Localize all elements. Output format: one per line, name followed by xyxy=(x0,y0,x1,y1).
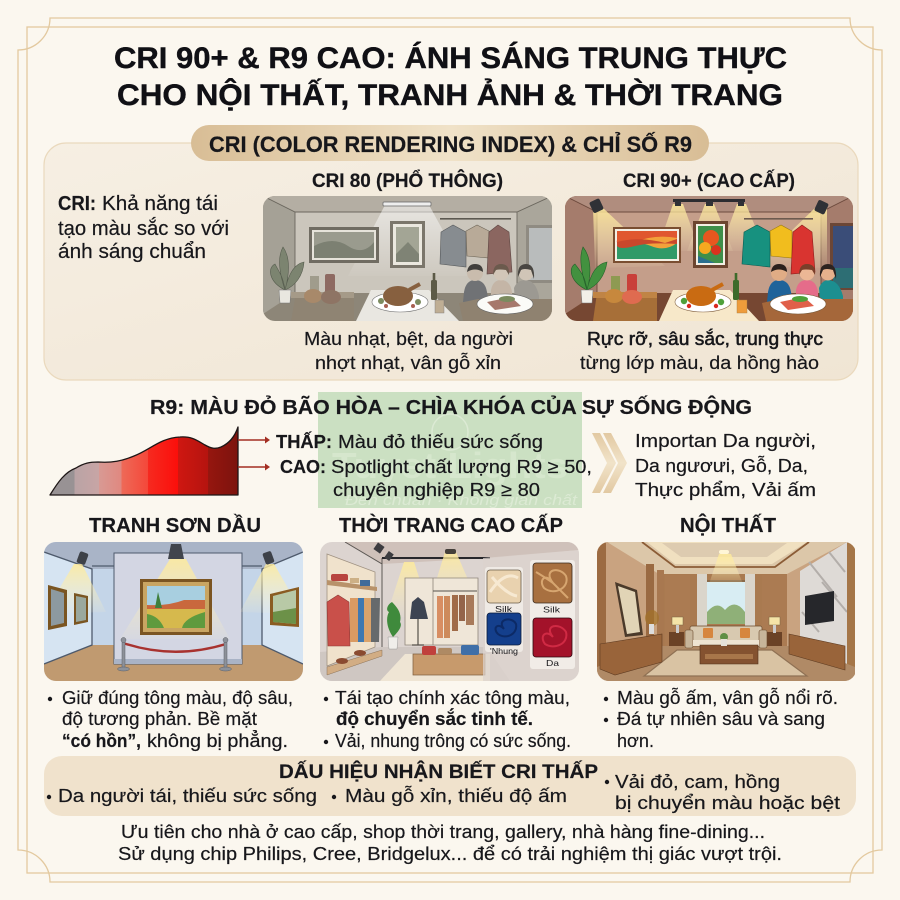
heading: R9: R9: MÀU ĐỎ BÃO HÒA – CHÌA KHÓA CỦA SỰ SỐNG ĐỘNG xyxy=(150,395,752,419)
text: important subjects: Importan Da người, xyxy=(635,430,816,451)
title: CHO NỘI THẤT, TRANH ẢNH & THỜI TRANG xyxy=(117,78,783,112)
arrow: high xyxy=(238,464,270,470)
bullets: interior: Màu gỗ ấm, vân gỗ nổi rõ. xyxy=(617,687,838,708)
bullets: oil painting: không bị phẳng. xyxy=(147,730,288,751)
caption: CRI 90+: từng lớp màu, da hồng hào xyxy=(580,352,819,373)
text: important subjects xyxy=(635,430,816,500)
text: high R9: Spotlight chất lượng R9 ≥ 50, xyxy=(331,456,592,477)
caption: CRI 80: nhợt nhạt, vân gỗ xỉn xyxy=(315,352,501,373)
heading: low CRI signs: DẤU HIỆU NHẬN BIẾT CRI THẤP xyxy=(279,759,598,783)
text: high R9 xyxy=(280,456,592,500)
swatch label: velvet: 'Nhung xyxy=(490,646,518,656)
text: important subjects: Thực phẩm, Vải ấm xyxy=(635,479,816,500)
panel: low CRI signs xyxy=(44,756,856,816)
CRI definition text: Khả năng tái xyxy=(102,193,218,215)
footer text: Ưu tiên cho nhà ở cao cấp, shop thời trang, gallery, nhà hàng fine-dining... xyxy=(121,821,765,842)
bullets: interior xyxy=(604,687,838,751)
bullets: fashion: Vải, nhung trông có sức sống. xyxy=(335,730,571,751)
heading: oil painting: TRANH SƠN DẦU xyxy=(89,514,261,537)
section: R9 xyxy=(50,395,816,500)
sign: fabric: Vải đỏ, cam, hồng xyxy=(615,771,780,792)
footer text: Sử dụng chip Philips, Cree, Bridgelux... để có trải nghiệm thị giác vượt trội. xyxy=(118,843,782,864)
bullets: interior: hơn. xyxy=(617,730,654,751)
panel: CRI comparison xyxy=(44,125,858,380)
CRI definition text: CRI: xyxy=(58,193,96,215)
heading pill: CRI and R9 xyxy=(191,125,709,161)
heading: interior: NỘI THẤT xyxy=(680,513,776,537)
arrow: low xyxy=(238,436,270,444)
icon: double chevron xyxy=(592,433,627,493)
sign: fabric xyxy=(605,771,840,813)
swatch: silk cream xyxy=(487,570,521,603)
title: CRI 90+ & R9 CAO: ÁNH SÁNG TRUNG THỰC xyxy=(114,41,787,75)
text: high R9: CAO: xyxy=(280,456,326,477)
bullets: fashion xyxy=(324,687,571,751)
footer text xyxy=(118,821,782,864)
CRI definition text xyxy=(58,193,229,263)
watermark xyxy=(318,392,582,509)
bullets: oil painting: độ tương phản. Bề mặt xyxy=(62,708,257,729)
illustration: living room xyxy=(597,542,855,681)
illustration: fashion boutique xyxy=(320,542,579,681)
CRI definition text: ánh sáng chuẩn xyxy=(58,241,206,263)
watermark: Đèn chuẩn · Không gian chất xyxy=(345,492,578,509)
text: high R9: chuyên nghiệp R9 ≥ 80 xyxy=(333,479,540,500)
title xyxy=(114,41,787,112)
watermark: Tuyet Lights xyxy=(332,445,568,486)
label: CRI 80: CRI 80 (PHỔ THÔNG) xyxy=(312,168,503,192)
sign: fabric: bị chuyển màu hoặc bệt xyxy=(615,792,840,813)
text: low R9: THẤP: xyxy=(276,431,332,452)
text: low R9: Màu đỏ thiếu sức sống xyxy=(338,431,543,452)
bullets: oil painting: “có hồn”, xyxy=(62,730,141,751)
chart: red saturation curve xyxy=(50,427,238,495)
bullets: interior: Đá tự nhiên sâu và sang xyxy=(617,708,825,729)
label: CRI 90+: CRI 90+ (CAO CẤP) xyxy=(623,169,795,192)
bullets: oil painting: Giữ đúng tông màu, độ sâu, xyxy=(62,687,293,708)
sign: wood: Màu gỗ xỉn, thiếu độ ấm xyxy=(345,785,567,806)
bullets: fashion: độ chuyển sắc tinh tế. xyxy=(336,708,533,729)
illustration: art gallery xyxy=(44,542,303,681)
bullets: fashion: Tái tạo chính xác tông màu, xyxy=(335,687,570,708)
swatch: silk brown xyxy=(533,563,572,603)
caption: CRI 80 xyxy=(304,328,513,373)
bullets: oil painting xyxy=(48,687,293,751)
heading: fashion: THỜI TRANG CAO CẤP xyxy=(339,513,563,537)
caption: CRI 90+: Rực rỡ, sâu sắc, trung thực xyxy=(587,328,823,349)
swatch label: silk: Silk xyxy=(543,604,561,614)
swatch: leather red xyxy=(533,618,572,657)
swatch label: leather: Da xyxy=(546,658,559,668)
caption: CRI 90+ xyxy=(580,328,823,373)
CRI definition text: tạo màu sắc so với xyxy=(58,217,229,240)
illustration: CRI 90+ dining room xyxy=(565,196,858,321)
text: important subjects: Da ngươưi, Gỗ, Da, xyxy=(635,455,808,476)
illustration: CRI 80 dining room xyxy=(263,196,556,321)
swatch: velvet navy xyxy=(487,613,521,645)
swatch label: silk: Silk xyxy=(495,604,513,614)
sign: skin: Da người tái, thiếu sức sống xyxy=(58,785,317,806)
heading pill: CRI and R9: CRI (COLOR RENDERING INDEX) & CHỈ SỐ R9 xyxy=(209,131,692,157)
caption: CRI 80: Màu nhạt, bệt, da người xyxy=(304,328,513,349)
